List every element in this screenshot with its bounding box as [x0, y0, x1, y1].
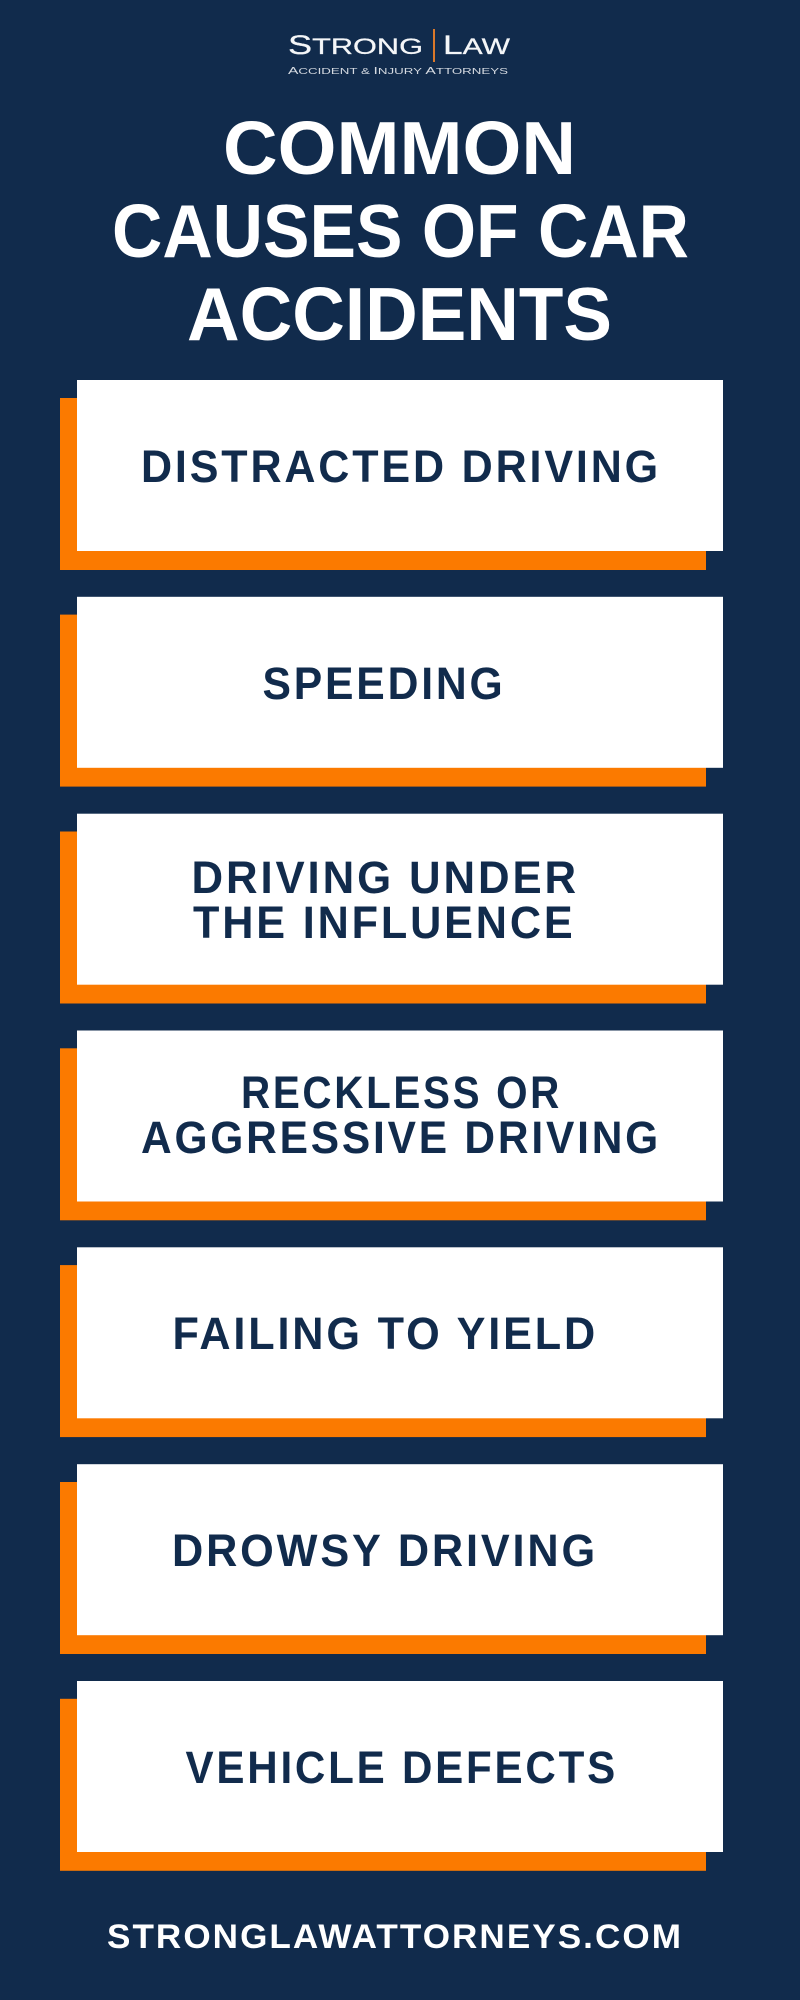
logo wordmark: Law: LAW [443, 30, 511, 60]
title [112, 106, 689, 356]
white card [77, 814, 723, 985]
label [141, 1067, 661, 1163]
label: DROWSY DRIVING [172, 1525, 598, 1576]
label: FAILING TO YIELD [172, 1308, 598, 1359]
panel: drowsy driving [60, 1464, 723, 1654]
panel: driving under the influence [60, 814, 723, 1004]
panel: distracted driving [60, 380, 723, 570]
label: VEHICLE DEFECTS [186, 1742, 618, 1793]
panel: vehicle defects [60, 1681, 723, 1871]
title: ACCIDENTS [187, 272, 612, 356]
label [192, 852, 579, 948]
orange offset shadow [60, 398, 706, 570]
logo divider [433, 29, 435, 62]
panel: failing to yield [60, 1247, 723, 1437]
title: CAUSES OF CAR [112, 189, 689, 273]
footer website: STRONGLAWATTORNEYS.COM [107, 1918, 683, 1956]
title: COMMON [223, 106, 576, 190]
label: RECKLESS OR [241, 1067, 562, 1118]
white card [77, 1464, 723, 1635]
orange offset shadow [60, 1265, 706, 1437]
orange offset shadow [60, 615, 706, 787]
panel: speeding [60, 597, 723, 787]
label: AGGRESSIVE DRIVING [141, 1112, 661, 1163]
white card [77, 1681, 723, 1852]
white card [77, 380, 723, 551]
label: DRIVING UNDER [192, 852, 579, 903]
orange offset shadow [60, 1482, 706, 1654]
logo wordmark: Strong: S TRONG [288, 30, 423, 60]
logo: Strong Law [288, 29, 511, 77]
white card [77, 597, 723, 768]
white card [77, 1247, 723, 1418]
orange offset shadow [60, 1699, 706, 1871]
label: SPEEDING [262, 658, 506, 709]
logo tagline: A CCIDENT & INJURY A TTORNEYS [288, 66, 508, 77]
panel: reckless or aggressive driving [60, 1030, 723, 1220]
white card [77, 1030, 723, 1202]
label: THE INFLUENCE [193, 897, 576, 948]
orange offset shadow [60, 832, 706, 1004]
orange offset shadow [60, 1048, 706, 1220]
label: DISTRACTED DRIVING [141, 441, 661, 492]
